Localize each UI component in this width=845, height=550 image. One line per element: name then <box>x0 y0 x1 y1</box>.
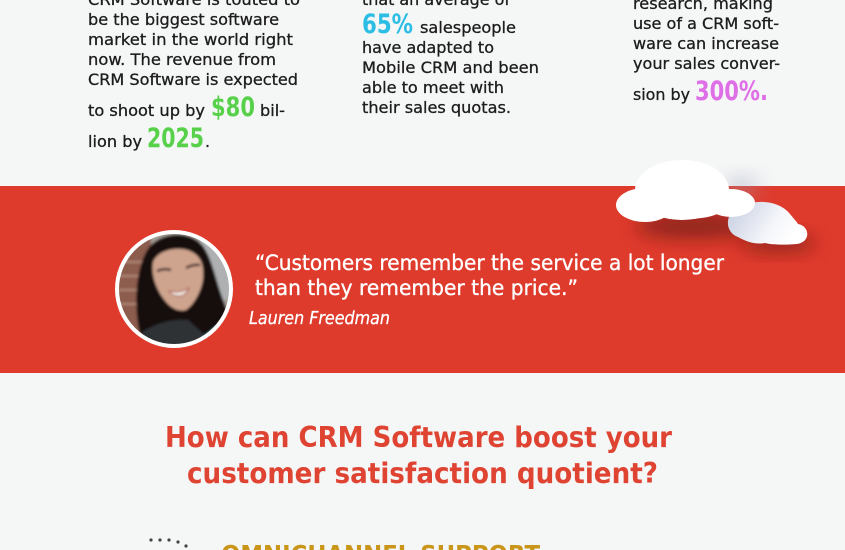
text block: mobile CRM statistic: 65% <box>362 9 413 40</box>
text block: sales conversion statistic: 300%. <box>695 76 768 107</box>
text block: market size statistic: CRM Software is expected <box>88 70 298 89</box>
text block: market size statistic: bil- <box>260 101 285 120</box>
text block: sales conversion statistic <box>633 0 780 107</box>
text block: market size statistic: lion by <box>88 132 142 151</box>
icon: dotted arc <box>149 538 188 548</box>
heading: customer satisfaction: How can CRM Software boost your <box>165 421 672 454</box>
heading: customer satisfaction <box>165 421 672 490</box>
text block: sales conversion statistic: ware can increase <box>633 34 779 53</box>
text block: mobile CRM statistic: Mobile CRM and been <box>362 58 539 77</box>
text block: mobile CRM statistic: their sales quotas. <box>362 98 511 117</box>
text block: sales conversion statistic: sion by <box>633 85 690 104</box>
quote attribution: Lauren Freedman <box>249 308 390 329</box>
icon: large cloud <box>616 160 755 222</box>
text block: mobile CRM statistic: have adapted to <box>362 38 494 57</box>
text block: market size statistic: 2025 <box>147 123 204 154</box>
quote text: “Customers remember the service a lot longer <box>255 251 724 276</box>
text block: market size statistic <box>88 0 300 154</box>
text block: market size statistic: now. The revenue from <box>88 50 276 69</box>
text block: market size statistic: to shoot up by <box>88 101 205 120</box>
icon: small cloud <box>728 202 807 245</box>
text block: mobile CRM statistic: able to meet with <box>362 78 504 97</box>
text block: market size statistic: be the biggest software <box>88 10 279 29</box>
text block: market size statistic: market in the world right <box>88 30 293 49</box>
text block: market size statistic: . <box>205 132 210 151</box>
text block: sales conversion statistic: your sales conver- <box>633 54 780 73</box>
panel: red quote band <box>0 186 845 373</box>
text block: sales conversion statistic: use of a CRM soft- <box>633 14 779 33</box>
text block: market size statistic: $80 <box>211 92 255 123</box>
text block: mobile CRM statistic: salespeople <box>420 18 516 37</box>
quote text <box>255 251 724 301</box>
icon: clouds <box>616 160 816 252</box>
quote text: than they remember the price.” <box>255 276 578 301</box>
text block: mobile CRM statistic <box>362 0 539 117</box>
heading: customer satisfaction: customer satisfaction quotient? <box>187 457 658 490</box>
portrait: Lauren Freedman <box>115 230 235 350</box>
